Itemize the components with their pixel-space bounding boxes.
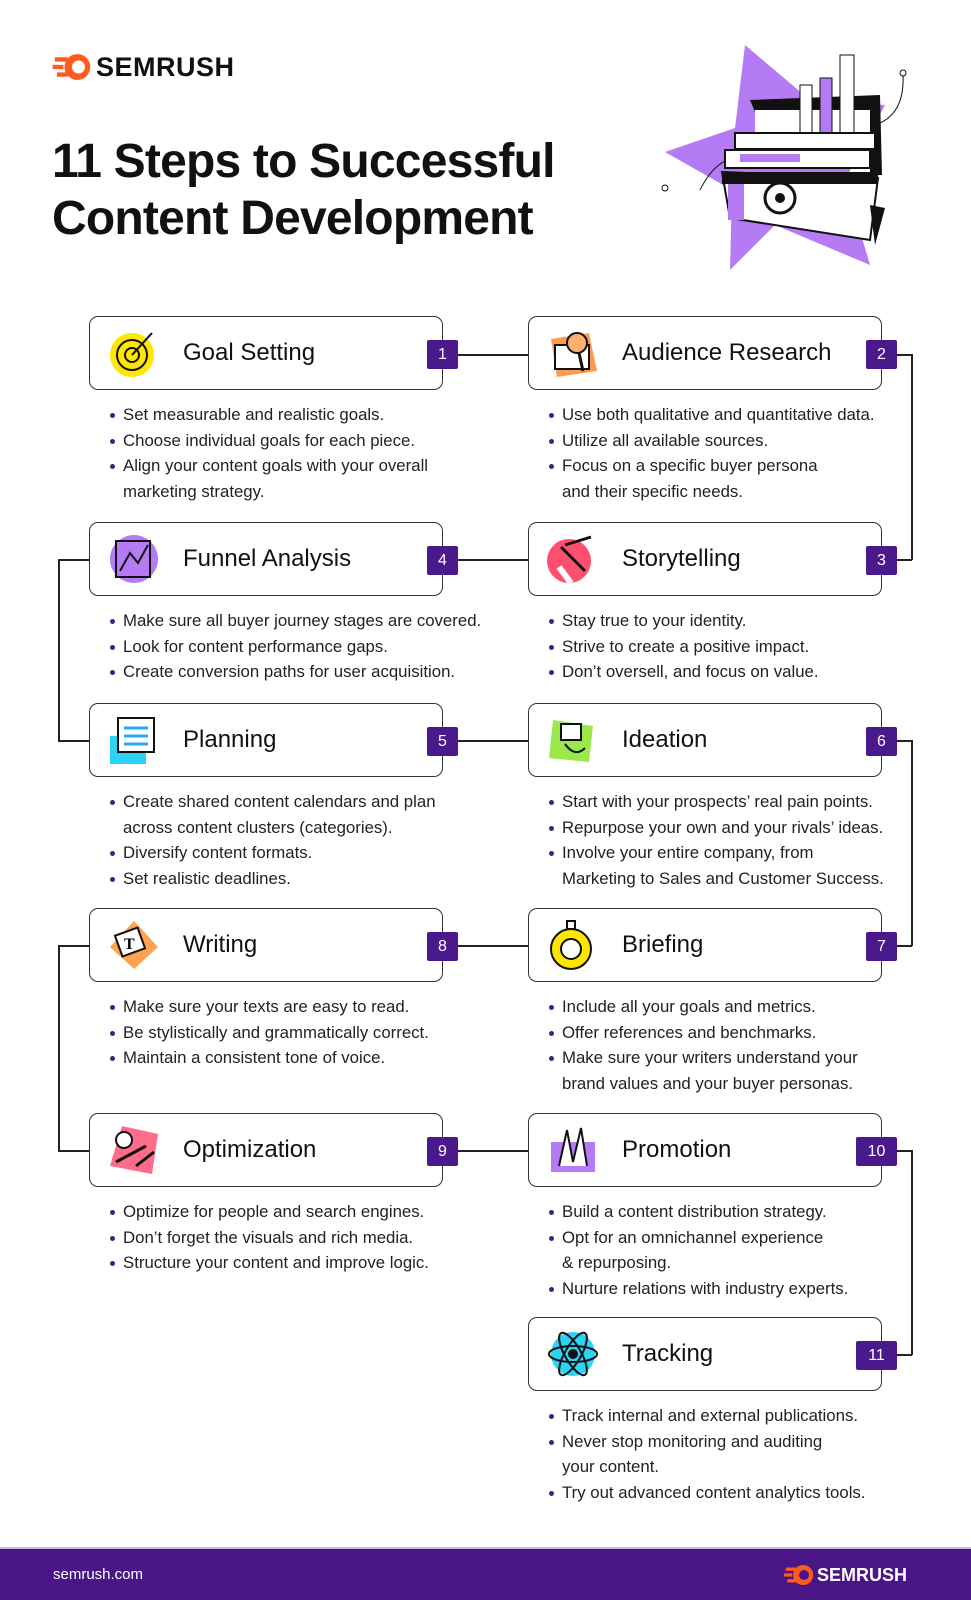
card 10: Promotion [528,1113,882,1187]
card 9: Optimization: Optimization [183,1136,316,1163]
text: Look for content performance gaps. [123,636,388,656]
text: Don’t forget the visuals and rich media. [123,1228,413,1246]
text: Align your content goals with your overall [123,456,428,475]
text: 11 [868,1347,885,1364]
card 2: Audience Research: Audience Research [622,339,831,366]
text: 7 [877,938,886,955]
card 11: Tracking [528,1317,882,1391]
card 1: Goal Setting: Goal Setting [183,339,315,366]
text: Offer references and benchmarks. [562,1022,816,1042]
text: brand values and your buyer personas. [562,1074,853,1092]
text: Create conversion paths for user acquisition. [123,662,455,681]
text: Opt for an omnichannel experience [562,1228,823,1246]
text: Try out advanced content analytics tools. [562,1482,865,1502]
card 11: Tracking: Tracking [622,1340,713,1367]
card 5: Planning: Planning [183,726,276,753]
text: Be stylistically and grammatically correct. [123,1022,429,1042]
card 4: Funnel Analysis: Funnel Analysis [183,545,351,572]
logo: SEMRUSH [96,52,235,82]
text: Structure your content and improve logic. [123,1253,429,1272]
text: Include all your goals and metrics. [562,997,816,1016]
text: 4 [438,552,447,569]
text: 2 [877,346,886,363]
text: Repurpose your own and your rivals’ ideas. [562,818,883,836]
text: across content clusters (categories). [123,818,393,836]
text: Optimize for people and search engines. [123,1202,424,1221]
card 5: Planning [89,703,443,777]
text: Use both qualitative and quantitative data. [562,405,875,424]
text: Track internal and external publications. [562,1406,858,1425]
illustration: toolbox [662,45,906,270]
card 8: Writing: Writing [183,931,257,958]
text: Maintain a consistent tone of voice. [123,1048,385,1067]
text: 10 [868,1143,885,1160]
card 7: Briefing: Briefing [622,931,703,958]
connectors [457,354,528,356]
text: 9 [438,1143,447,1160]
text: your content. [562,1457,659,1476]
text: Start with your prospects’ real pain points. [562,792,873,811]
text: 3 [877,552,886,569]
text: Create shared content calendars and plan [123,792,436,811]
text: Make sure all buyer journey stages are covered. [123,611,481,630]
card 4: Funnel Analysis [89,522,443,596]
card 9: Optimization [89,1113,443,1187]
text: Nurture relations with industry experts. [562,1278,848,1298]
text: Diversify content formats. [123,843,312,862]
text: & repurposing. [562,1253,671,1272]
text: Don’t oversell, and focus on value. [562,662,819,681]
text: 5 [438,733,447,750]
card 3: Storytelling: Storytelling [622,545,741,572]
title: 11 Steps to Successful [52,135,555,188]
card 8: Writing [89,908,443,982]
text: Involve your entire company, from [562,843,814,862]
text: Build a content distribution strategy. [562,1202,827,1221]
text: Make sure your texts are easy to read. [123,997,409,1016]
text: Make sure your writers understand your [562,1048,858,1067]
title [52,135,555,245]
card 10: Promotion: Promotion [622,1136,731,1163]
card 1: Goal Setting [89,316,443,390]
text: 8 [438,938,447,955]
text: Set measurable and realistic goals. [123,405,384,424]
card 2: Audience Research [528,316,882,390]
text: Never stop monitoring and auditing [562,1432,822,1450]
card 6: Ideation: Ideation [622,726,707,753]
text: and their specific needs. [562,482,743,500]
card 6: Ideation [528,703,882,777]
title: Content Development [52,192,533,245]
text: Utilize all available sources. [562,430,768,450]
text: marketing strategy. [123,482,264,500]
text: Set realistic deadlines. [123,868,291,888]
text: 1 [438,346,447,363]
text: 6 [877,733,886,750]
footer logo: SEMRUSH [817,1565,907,1585]
text: Marketing to Sales and Customer Success. [562,868,884,888]
card 8: Writing: T [124,936,135,953]
footer [0,1547,971,1600]
footer: semrush.com [53,1566,143,1583]
text: Focus on a specific buyer persona [562,456,818,475]
card 3: Storytelling [528,522,882,596]
text: Stay true to your identity. [562,611,746,630]
text: Strive to create a positive impact. [562,636,809,656]
card 7: Briefing [528,908,882,982]
text: Choose individual goals for each piece. [123,430,415,450]
